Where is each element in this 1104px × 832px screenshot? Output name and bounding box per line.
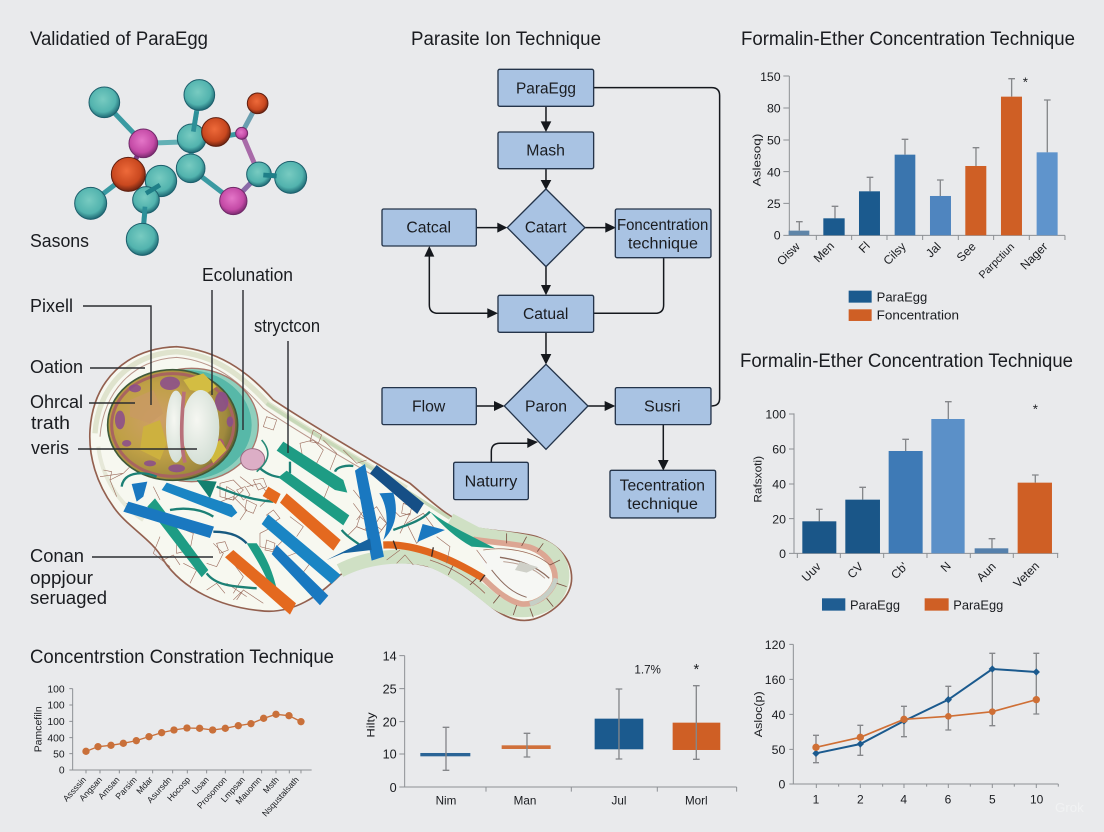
y tick labels: 120 (765, 638, 785, 652)
diamond: Paron: Paron (525, 398, 567, 415)
axes (789, 644, 1058, 788)
y tick labels: 25 (767, 197, 781, 211)
y tick labels (765, 408, 786, 561)
x labels: Asursdn (145, 775, 174, 805)
y tick labels: 400 (47, 733, 65, 744)
box: Tecentration technique: Tecentration (620, 477, 705, 494)
ribbons: teal (147, 442, 495, 592)
box: Foncentration technique: Foncentration (617, 217, 708, 234)
teal connectors (122, 462, 430, 588)
box: Susri: Susri (644, 398, 681, 415)
box: Catcal: Catcal (406, 220, 451, 237)
error bars (813, 653, 1039, 763)
x labels: Parpctiun (977, 241, 1017, 281)
y tick labels: 25 (383, 682, 397, 696)
y tick labels: 100 (765, 408, 786, 422)
box: Susri (615, 388, 711, 425)
body outline (90, 347, 572, 620)
x labels: Angsan (77, 774, 104, 803)
ribbons: orange (225, 487, 341, 615)
label: seruaged: seruaged (30, 588, 107, 608)
box: Naturry (454, 462, 528, 500)
axes (783, 76, 1065, 240)
cell network (100, 417, 487, 603)
x labels (436, 795, 708, 808)
box: Catual: Catual (523, 306, 568, 323)
x labels: Amsan (96, 775, 122, 801)
legend (849, 290, 959, 323)
x labels: Fl (856, 239, 873, 256)
significance star: * (1023, 75, 1028, 90)
box: Mash: Mash (526, 143, 565, 160)
hook lumen (480, 550, 551, 599)
y tick labels (765, 638, 785, 792)
y tick labels: 0 (59, 766, 65, 777)
series: blue (812, 665, 1040, 757)
box: Tecentration technique: technique (627, 496, 698, 513)
band outlines (430, 549, 550, 593)
y tick labels: 50 (767, 133, 781, 147)
label: stryctcon: stryctcon (254, 316, 320, 336)
x labels: Cilsy (881, 240, 909, 268)
label: Oation: Oation (30, 357, 83, 377)
title: Formalin-Ether Concentration Technique (middle): Formalin-Ether Concentration Technique (740, 351, 1073, 372)
x labels: Jul (612, 795, 626, 808)
x labels: See (954, 239, 979, 265)
axes (399, 656, 737, 792)
y tick labels: 0 (779, 547, 786, 561)
x labels: CV (844, 560, 866, 581)
significance star: * (693, 662, 699, 678)
x labels: 5 (989, 793, 996, 807)
egg yolk (108, 370, 238, 480)
line chart: bottom left (34, 684, 312, 819)
x labels: 4 (900, 793, 907, 807)
y tick labels: 100 (47, 717, 65, 728)
tail band with hook (340, 520, 562, 610)
watermark: Grok (1055, 800, 1084, 815)
title: Formalin-Ether Concentration Technique (top): Formalin-Ether Concentration Technique (741, 29, 1075, 50)
significance star: * (1033, 401, 1038, 416)
y axis label: Pamcefiln (34, 706, 45, 752)
box: Catcal (382, 209, 476, 246)
y tick labels: 50 (772, 743, 785, 757)
pink blob (241, 449, 265, 470)
x labels (61, 774, 301, 819)
bar chart: top right (752, 70, 1065, 323)
y tick labels: 20 (383, 715, 397, 729)
x labels: Veten (1011, 559, 1042, 590)
x labels (799, 559, 1042, 590)
x labels: Nsqustalsath (260, 775, 301, 819)
y axis label: Aslesoq) (752, 134, 764, 186)
x labels: Aun (974, 560, 999, 585)
box: Flow (382, 388, 476, 425)
y tick labels: 0 (390, 781, 397, 795)
y tick labels (760, 70, 781, 243)
x labels: Man (514, 795, 536, 808)
y axis label: Hilty (366, 712, 378, 738)
series: orange (812, 696, 1040, 751)
x labels (774, 239, 1050, 281)
box: Naturry: Naturry (465, 473, 518, 490)
x labels: Oisw (774, 239, 803, 268)
y tick labels: 50 (53, 749, 65, 760)
x labels: Jal (923, 240, 944, 260)
y tick labels (383, 649, 397, 795)
data line (86, 714, 301, 751)
label: oppjour: oppjour (30, 568, 93, 588)
bars (789, 231, 809, 235)
error bars (816, 402, 1039, 548)
x labels: 2 (857, 793, 864, 807)
x labels: Uuv (799, 560, 824, 585)
legend: ParaEgg (877, 290, 927, 304)
x labels: 6 (945, 793, 952, 807)
y tick labels (47, 684, 65, 777)
error bars (796, 79, 1051, 231)
axes (789, 413, 1058, 558)
box: Catual (498, 295, 594, 332)
x labels: Usan (190, 775, 211, 796)
y tick labels: 150 (760, 70, 781, 84)
box: ParaEgg: ParaEgg (516, 80, 576, 97)
x labels: Nim (436, 795, 456, 808)
arrowheads (424, 121, 669, 471)
y tick labels: 100 (47, 684, 65, 695)
canal black ticks (393, 541, 485, 582)
whiskers (443, 686, 700, 770)
y tick labels: 14 (383, 649, 397, 663)
orange canal (383, 545, 483, 578)
y tick labels: 40 (772, 478, 786, 492)
band segment ticks (448, 533, 567, 617)
label: Ohrcal trath: Ohrcal (30, 392, 83, 412)
title: Concentrstion Constration Technique: Concentrstion Constration Technique (30, 647, 334, 668)
legend: ParaEgg (953, 598, 1003, 612)
title: Validatied of ParaEgg: Validatied of ParaEgg (30, 29, 208, 50)
white lobes (166, 391, 186, 463)
x labels: Msth (261, 775, 281, 795)
box: Foncentration technique (615, 209, 711, 258)
x labels: Men (811, 239, 837, 265)
diamond: Catart (507, 189, 585, 267)
x labels: Morl (685, 795, 708, 808)
label: Pixell: Pixell (30, 296, 73, 316)
y tick labels: 40 (767, 165, 781, 179)
diamond: Catart: Catart (525, 220, 567, 237)
annotation: 1.7% (634, 663, 661, 676)
y axis label: Rafsxoti) (752, 456, 764, 503)
egg teal outer layer (125, 368, 258, 482)
legend (822, 598, 1003, 612)
x labels: Prosomon (195, 774, 229, 811)
x labels: Assssin (61, 774, 88, 803)
boxes (420, 753, 470, 756)
data points (82, 711, 305, 755)
yellow patches (183, 373, 217, 393)
y tick labels: 20 (772, 512, 786, 526)
y tick labels: 40 (772, 708, 785, 722)
title: Parasite Ion Technique: Parasite Ion Technique (411, 29, 601, 50)
labels and leader lines for the egg (30, 265, 320, 608)
y tick labels: 0 (774, 229, 781, 243)
x labels (813, 793, 1044, 807)
box: Foncentration technique: technique (628, 236, 698, 253)
connectors (429, 88, 720, 462)
parasite egg illustration (90, 347, 572, 620)
x labels: Lmpsan (219, 774, 247, 804)
x labels: 10 (1030, 793, 1044, 807)
label: trath: trath (31, 413, 70, 433)
molecule model (75, 80, 307, 255)
x labels: Cb' (888, 560, 910, 582)
x labels: Hocosp (165, 775, 192, 803)
label: veris: veris (31, 438, 69, 458)
y tick labels: 80 (767, 101, 781, 115)
box: ParaEgg (498, 69, 594, 106)
x labels: N (938, 559, 954, 575)
axes (69, 689, 312, 773)
label: Conan: Conan (30, 546, 84, 566)
x labels: Nager (1017, 240, 1050, 273)
diamond: Paron (504, 364, 588, 449)
legend: ParaEgg (850, 598, 900, 612)
x labels: 1 (813, 793, 820, 807)
line chart: bottom right (753, 638, 1084, 815)
x labels: Mauomn (233, 775, 264, 806)
x labels: Mdar (134, 775, 155, 796)
box plot: bottom centre (366, 649, 737, 808)
y tick labels: 10 (383, 748, 397, 762)
box: Mash (498, 132, 594, 169)
box: Tecentration technique (610, 470, 716, 518)
flowchart (382, 69, 720, 518)
legend: Foncentration (877, 309, 959, 323)
ribbons: blue (123, 464, 445, 605)
y tick labels: 100 (47, 701, 65, 712)
y axis label: Asloc(p) (753, 691, 765, 737)
bar chart: middle right (752, 401, 1058, 612)
purple blotches (115, 377, 233, 472)
y tick labels: 60 (772, 443, 786, 457)
box: Flow: Flow (412, 398, 446, 415)
label: Sasons: Sasons (30, 231, 89, 251)
label: Ecolunation: Ecolunation (202, 265, 293, 285)
shell band (95, 352, 407, 488)
x labels: Parsim (113, 775, 139, 801)
bars (802, 521, 836, 553)
y tick labels: 160 (765, 673, 785, 687)
y tick labels: 0 (778, 778, 785, 792)
